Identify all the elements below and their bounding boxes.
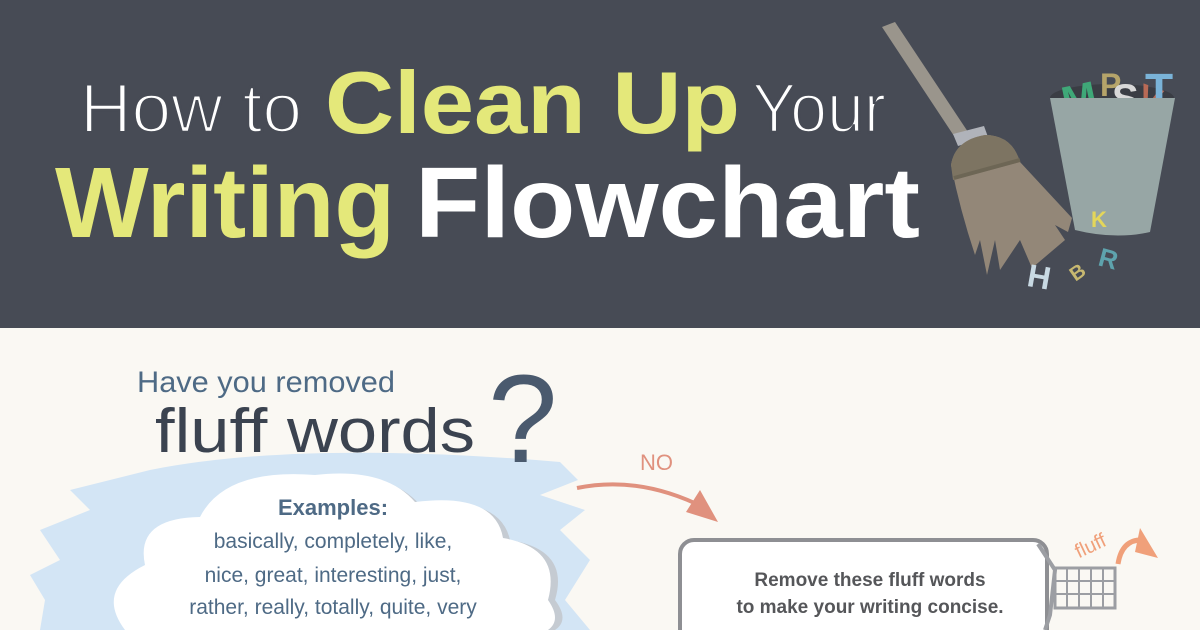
icon: trash can with letters: P [1100, 67, 1121, 103]
icon: trash can with letters: R [1095, 242, 1122, 276]
icon: cart with fluff [1038, 528, 1158, 630]
cloud: examples: rather, really, totally, quite, very [189, 596, 477, 619]
label: NO: NO [640, 450, 673, 475]
icon: trash can with letters: K [1091, 207, 1107, 232]
cloud: examples: Examples: [278, 495, 388, 520]
title: How to [80, 69, 302, 147]
question: have you removed fluff words [137, 350, 558, 489]
icon: broom [882, 22, 1072, 275]
title: Writing [55, 147, 395, 259]
cloud: examples: nice, great, interesting, just, [205, 564, 461, 587]
header band [0, 0, 1200, 328]
question: have you removed fluff words: Have you removed [137, 366, 395, 399]
box: remove fluff: Remove these fluff words [754, 570, 986, 591]
icon: trash can with letters: T [1145, 64, 1173, 116]
blue scribble [30, 453, 590, 630]
icon: trash can with letters: B [1066, 260, 1090, 286]
icon: trash can with letters: M [1057, 72, 1101, 125]
cloud: examples: basically, completely, like, [214, 530, 452, 553]
box: remove fluff [680, 540, 1047, 630]
question: have you removed fluff words: fluff words [155, 397, 475, 466]
arrow: NO [577, 484, 718, 522]
box: remove fluff: to make your writing concise. [736, 597, 1004, 618]
icon: cart with fluff: fluff [1072, 529, 1110, 563]
icon: trash can with letters [1025, 64, 1175, 297]
title: Your [752, 69, 886, 147]
title: Flowchart [415, 147, 920, 259]
cloud: examples [114, 474, 562, 630]
icon: trash can with letters: H [1025, 257, 1054, 297]
title [55, 53, 920, 259]
title: Clean Up [325, 53, 740, 152]
icon: trash can with letters: V [1133, 77, 1167, 121]
icon: trash can with letters: S [1112, 77, 1139, 121]
question: have you removed fluff words: ? [488, 350, 558, 489]
